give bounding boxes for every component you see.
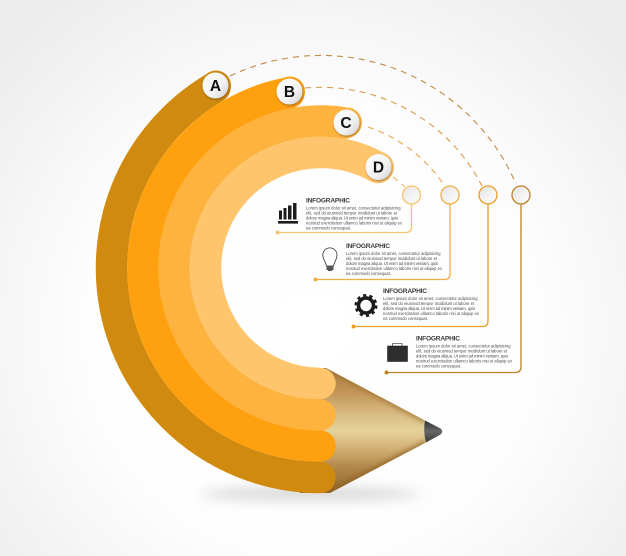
text block 4: Lorem ipsum dolor sit amet, consectetur adipisicing [416, 344, 511, 348]
badge C: C [340, 115, 352, 132]
text block 4: nostrud exercitation ullamco laboris nisi ut aliquip ex [416, 358, 512, 364]
band B [143, 93, 320, 446]
text block 3: dolore magna aliqua. Ut enim ad minim veniam, quis [383, 306, 475, 311]
text block 3: INFOGRAPHIC [383, 288, 427, 295]
dashed arc A [230, 55, 516, 184]
text block 1: dolore magna aliqua. Ut enim ad minim veniam, quis [306, 216, 398, 220]
connector line 4 [385, 186, 530, 374]
text block 1: ea commodo consequat. [306, 226, 351, 230]
connector line 1 [276, 186, 420, 234]
dashed connectors [230, 55, 516, 187]
text block 3: Lorem ipsum dolor sit amet, consectetur adipisicing [383, 296, 478, 301]
text block 2: nostrud exercitation ullamco laboris nisi ut aliquip ex [346, 266, 442, 271]
text block 4: elit, sed do eiusmod tempor incididunt ut labore et [416, 348, 508, 354]
badge D [364, 152, 394, 182]
icon: gear [356, 296, 376, 316]
text block 2: ea commodo consequat. [346, 271, 391, 276]
badge C [332, 108, 362, 138]
text block 3 [383, 288, 479, 321]
text block 2: Lorem ipsum dolor sit amet, consectetur adipisicing [346, 251, 441, 256]
pencil body bands [112, 87, 378, 478]
text block 2: elit, sed do eiusmod tempor incididunt ut labore et [346, 256, 438, 261]
pencil shadow [200, 487, 420, 501]
band A [112, 87, 320, 478]
connector line 2 [314, 186, 459, 281]
badge B: B [284, 84, 295, 101]
icon: briefcase [388, 344, 408, 362]
text block 4 [416, 336, 512, 368]
icon: light bulb [323, 248, 337, 271]
badge B [275, 76, 305, 106]
icon: pencil lead [424, 420, 442, 442]
badge A: A [210, 78, 221, 95]
text block 2 [346, 243, 442, 276]
pencil wood tip [300, 368, 430, 493]
text block 2: dolore magna aliqua. Ut enim ad minim veniam, quis [346, 261, 438, 266]
text block 4: ea commodo consequat. [416, 364, 461, 368]
band D [205, 152, 378, 384]
text block 1 [306, 198, 402, 230]
dashed arc B [305, 87, 482, 186]
text block 1: nostrud exercitation ullamco laboris nisi ut aliquip ex [306, 220, 402, 226]
connector line 3 [352, 186, 497, 328]
text block 1: INFOGRAPHIC [306, 198, 350, 204]
text block 3: ea commodo consequat. [383, 316, 428, 321]
text block 4: INFOGRAPHIC [416, 336, 460, 342]
icon: bar chart [278, 203, 298, 224]
band C [174, 121, 345, 415]
text block 2: INFOGRAPHIC [346, 243, 390, 250]
text block 1: Lorem ipsum dolor sit amet, consectetur adipisicing [306, 206, 401, 210]
text block 4: dolore magna aliqua. Ut enim ad minim veniam, quis [416, 354, 508, 358]
text block 3: elit, sed do eiusmod tempor incididunt ut labore et [383, 301, 475, 306]
badge A [201, 70, 231, 100]
badge D: D [373, 160, 384, 176]
text block 3: nostrud exercitation ullamco laboris nisi ut aliquip ex [383, 311, 479, 316]
text block 1: elit, sed do eiusmod tempor incididunt ut labore et [306, 210, 398, 216]
dashed arc D [393, 177, 405, 187]
dashed arc C [368, 127, 444, 185]
